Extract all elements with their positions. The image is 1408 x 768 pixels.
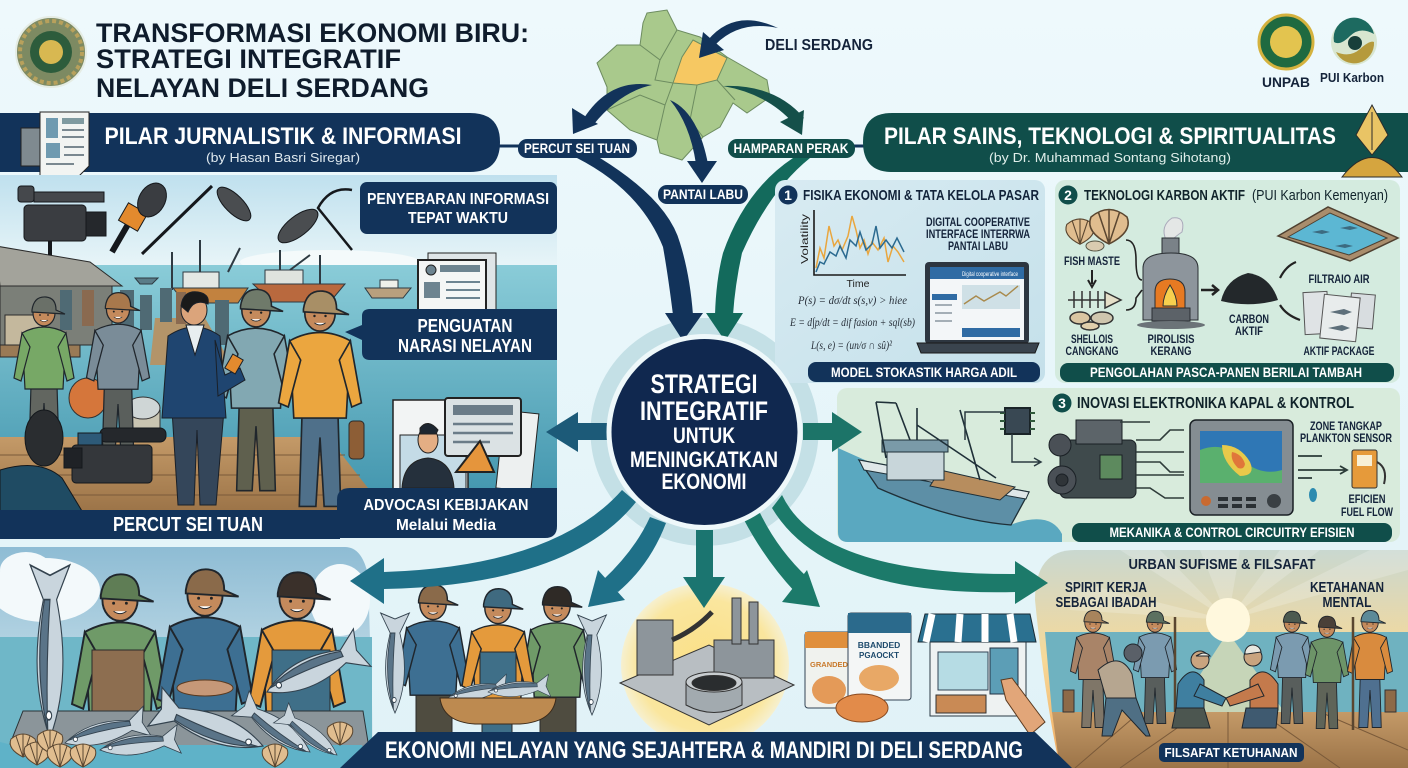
label: fuel flow <box>1341 494 1393 519</box>
label: pirolisis: PIROLISIS <box>1148 334 1195 346</box>
arrow: map to Hamparan Perak <box>723 86 804 135</box>
label: ketahanan mental: MENTAL <box>1322 594 1372 611</box>
chart: volatility: Time <box>847 278 870 290</box>
connector lines <box>495 144 870 148</box>
centre circle: strategi integratif: UNTUK <box>673 423 735 448</box>
bar: model stokastik <box>808 362 1040 382</box>
icon: speech document <box>418 253 496 322</box>
arrow: map to Percut Sei Tuan <box>572 84 652 134</box>
panel: sufism scene <box>1035 550 1408 768</box>
arrow: to carbon <box>1201 285 1218 295</box>
fish: held tuna <box>30 565 70 738</box>
centre circle: strategi integratif: INTEGRATIF <box>640 396 768 426</box>
bar: percut sei tuan <box>0 510 340 539</box>
kneeling men <box>1098 644 1278 736</box>
icon: branded packages: PGAOCKT <box>859 651 899 660</box>
panel 2: karbon aktif <box>1055 180 1400 383</box>
formulas: P(s) = dσ/dt s(s,v) > hiee <box>797 293 908 307</box>
centre circle: strategi integratif: STRATEGI <box>650 369 758 399</box>
icon: shells <box>1066 210 1128 251</box>
panel 2: karbon aktif: FISH MASTE <box>1064 256 1120 268</box>
dock <box>0 437 386 511</box>
chart: volatility: Volatility <box>800 214 811 264</box>
icon: laptop <box>917 262 1039 353</box>
formulas <box>789 293 915 352</box>
icon: digital market stall <box>918 614 1045 735</box>
icon: video camera <box>18 186 106 255</box>
ribbon: pilar sains: PILAR SAINS, TEKNOLOGI & SPIRITUALITAS <box>884 123 1336 150</box>
icon: factory <box>620 583 794 747</box>
icon: gold pen <box>1342 105 1402 177</box>
arrow: centre to left scene <box>546 412 607 452</box>
label: fuel flow: EFICIEN <box>1348 494 1386 506</box>
label: zone tangkap: ZONE TANGKAP <box>1310 421 1382 433</box>
fish: tuna held right <box>258 629 371 711</box>
icon: fish bones and shells <box>1068 291 1121 330</box>
fish: basket catch <box>446 674 511 709</box>
callout: advokasi kebijakan <box>337 488 557 538</box>
icon: branded packages <box>805 613 911 722</box>
people: second fishermen group <box>381 585 606 767</box>
label: carbon aktif: AKTIF <box>1235 326 1263 338</box>
map: Deli Serdang <box>597 10 770 160</box>
icon: laptop: Digital cooperative interface <box>962 272 1018 278</box>
chart: volatility <box>800 210 906 290</box>
label: spirit kerja: SPIRIT KERJA <box>1065 579 1147 596</box>
arrow: to furnace <box>1126 240 1142 310</box>
background crowd and walkway <box>60 288 232 365</box>
label: carbon aktif <box>1229 314 1269 338</box>
label: pirolisis <box>1148 334 1195 358</box>
arrow: map to Pantai Labu <box>670 100 717 183</box>
banner: ekonomi nelayan: EKONOMI NELAYAN YANG SEJAHTERA & MANDIRI DI DELI SERDANG <box>385 737 1023 764</box>
arrow: label to map <box>699 20 778 58</box>
icon: fuel pump <box>1309 450 1385 502</box>
icon: branded packages: GRANDED <box>810 660 849 669</box>
dock post <box>349 421 364 459</box>
callout: penguatan narasi: NARASI NELAYAN <box>398 336 532 356</box>
ribbon: pilar sains: (by Dr. Muhammad Sontang Sihotang) <box>989 150 1231 165</box>
arrow: carbon to outputs <box>1280 262 1300 320</box>
panel 2: karbon aktif: 2 <box>1064 187 1072 203</box>
label: digital cooperative <box>926 215 1030 253</box>
title: STRATEGI INTEGRATIF <box>96 44 401 74</box>
bar: model stokastik: MODEL STOKASTIK HARGA ADIL <box>831 364 1017 380</box>
panel 3: inovasi elektronika: 3 <box>1058 395 1066 411</box>
dock posts <box>1063 690 1074 712</box>
callout: penguatan narasi <box>345 309 557 360</box>
arrow: bottom fourth <box>743 513 820 607</box>
label: ketahanan mental <box>1310 579 1384 611</box>
bar: pengolahan: PENGOLAHAN PASCA-PANEN BERILAI TAMBAH <box>1090 364 1362 380</box>
icon: branded packages: BBANDED <box>858 640 900 650</box>
label: shells: CANGKANG <box>1066 346 1119 358</box>
arrow: Percut to centre <box>577 158 703 341</box>
illustration: vessel on water <box>838 402 1062 542</box>
panel 2: karbon aktif: FILTRAIO AIR <box>1308 274 1370 286</box>
market shack <box>0 246 122 357</box>
arrow: centre to panel 3 <box>803 412 862 452</box>
logo: PUI Karbon: PUI Karbon <box>1320 71 1384 85</box>
icon: chip <box>965 408 1041 466</box>
panel 1: fisika ekonomi <box>775 180 1045 383</box>
panel 3: inovasi elektronika <box>837 388 1400 542</box>
panel 1: fisika ekonomi: 1 <box>784 187 792 203</box>
centre circle: strategi integratif <box>606 334 802 530</box>
circuit traces <box>1120 422 1184 498</box>
title: TRANSFORMASI EKONOMI BIRU: <box>96 18 529 48</box>
logo: left emblem <box>16 17 86 87</box>
icon: engine <box>1048 420 1136 498</box>
cameraman foreground <box>0 410 166 511</box>
label: Deli Serdang: DELI SERDANG <box>765 37 873 54</box>
label: digital cooperative: INTERFACE INTERRWA <box>926 227 1030 241</box>
label: shells <box>1066 334 1119 358</box>
icon: filter pool <box>1278 207 1398 261</box>
icon: newspaper <box>21 112 89 177</box>
basket <box>440 698 556 724</box>
centre circle: strategi integratif: MENINGKATKAN <box>630 447 778 472</box>
label: carbon aktif: CARBON <box>1229 314 1269 326</box>
fish crate <box>0 711 372 768</box>
label: ketahanan mental: KETAHANAN <box>1310 579 1384 596</box>
ring around centre <box>590 318 818 546</box>
callout: penyebaran informasi: TEPAT WAKTU <box>408 210 508 227</box>
label: Pantai Labu: PANTAI LABU <box>663 187 743 202</box>
people: three fishermen <box>72 569 345 722</box>
icon: policy documents <box>393 398 539 492</box>
title: NELAYAN DELI SERDANG <box>96 73 429 103</box>
baskets <box>69 378 107 418</box>
background boats <box>135 240 411 303</box>
callout: advokasi kebijakan: Melalui Media <box>396 517 496 534</box>
bar: mekanika: MEKANIKA & CONTROL CIRCUITRY EFISIEN <box>1110 524 1354 540</box>
label: spirit kerja: SEBAGAI IBADAH <box>1056 594 1156 611</box>
callout: advokasi kebijakan: ADVOCASI KEBIJAKAN <box>364 497 528 514</box>
ribbon: pilar jurnalistik <box>0 112 500 177</box>
panel 2: karbon aktif: AKTIF PACKAGE <box>1304 346 1375 358</box>
banner: ekonomi nelayan <box>340 732 1072 768</box>
arrow: bottom centre <box>683 530 725 608</box>
callout: penguatan narasi: PENGUATAN <box>418 316 512 336</box>
logo: PUI Karbon <box>1320 18 1384 85</box>
people: group <box>1070 610 1392 736</box>
arrow: Hamparan to centre <box>706 158 810 341</box>
icon: handheld mic <box>112 178 172 252</box>
icon: boom mic <box>142 182 256 254</box>
logo: UNPAB <box>1259 15 1313 90</box>
label: digital cooperative: DIGITAL COOPERATIVE <box>926 215 1030 229</box>
callout: penyebaran informasi: PENYEBARAN INFORMASI <box>367 191 549 208</box>
fish: crate catch <box>10 687 353 767</box>
panel: journalism scene <box>0 175 557 511</box>
label: spirit kerja <box>1056 579 1156 611</box>
arrow: bottom-right sweep <box>772 495 1048 604</box>
logo: UNPAB: UNPAB <box>1262 74 1310 90</box>
icon: sonar screen <box>1190 420 1293 515</box>
arrow: waste down <box>1088 270 1096 287</box>
arrow: bottom second <box>588 517 666 607</box>
icon: carbon pile <box>1221 273 1278 304</box>
fish: side tuna <box>381 613 409 713</box>
label: fuel flow: FUEL FLOW <box>1341 507 1393 519</box>
label: urban sufisme: URBAN SUFISME & FILSAFAT <box>1128 556 1316 573</box>
panel 2: karbon aktif: TEKNOLOGI KARBON AKTIF <box>1084 187 1245 204</box>
label: shells: SHELLOIS <box>1071 334 1113 346</box>
people: reporters and fishermen <box>14 289 361 506</box>
ribbon: pilar jurnalistik: PILAR JURNALISTIK & INFORMASI <box>104 123 462 150</box>
formulas: L(s, e) = (un/σ ∩ sû)² <box>810 338 892 352</box>
icon: pyrolysis furnace <box>1137 218 1205 329</box>
label: pirolisis: KERANG <box>1150 346 1192 358</box>
label: Percut Sei Tuan: PERCUT SEI TUAN <box>524 141 630 156</box>
label: filsafat ketuhanan: FILSAFAT KETUHANAN <box>1164 745 1298 760</box>
arrow: bottom-left sweep <box>350 490 636 604</box>
icon: active carbon packages <box>1303 291 1375 342</box>
panel: fishermen with catch <box>0 547 374 768</box>
title <box>96 18 529 103</box>
arrow: sensor to pump <box>1298 456 1347 478</box>
icon: shotgun mic <box>273 189 352 250</box>
label: Hamparan Perak: HAMPARAN PERAK <box>734 141 849 156</box>
ribbon: pilar jurnalistik: (by Hasan Basri Siregar) <box>206 150 360 165</box>
bar: percut sei tuan: PERCUT SEI TUAN <box>113 514 263 536</box>
ribbon: pilar sains <box>863 105 1408 177</box>
label: zone tangkap <box>1300 421 1393 445</box>
formulas: E = d∫p/dt = dif fasion + sql(sb) <box>789 315 915 329</box>
centre circle: strategi integratif: EKONOMI <box>662 469 746 494</box>
panel 1: fisika ekonomi: FISIKA EKONOMI & TATA KELOLA PASAR <box>803 187 1039 204</box>
callout: penyebaran informasi <box>360 182 557 234</box>
reporter <box>162 292 245 505</box>
label: digital cooperative: PANTAI LABU <box>948 239 1008 253</box>
